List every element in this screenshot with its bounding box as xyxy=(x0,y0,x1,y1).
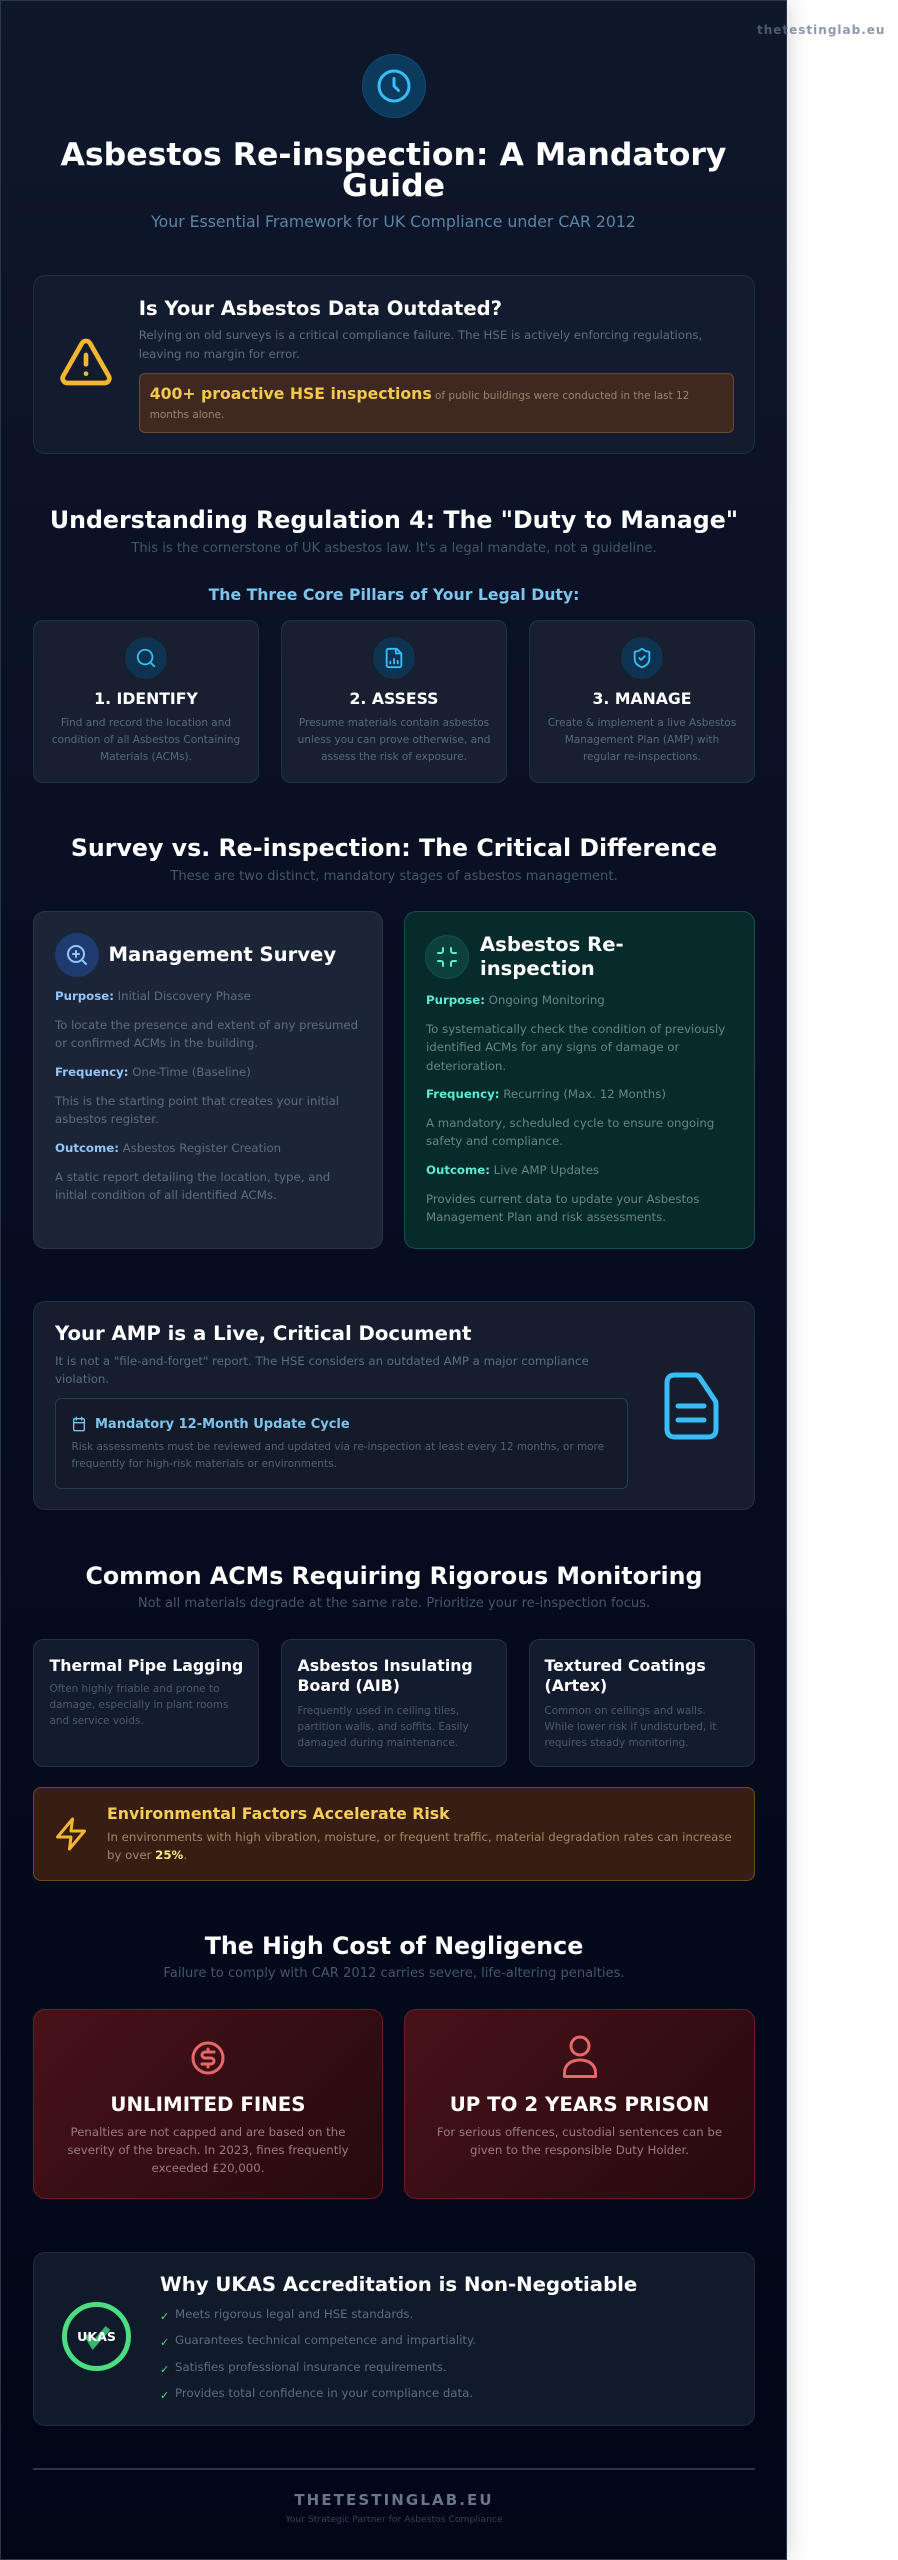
panel body text xyxy=(139,328,702,360)
card details: To locate the presence and extent of any presumed xyxy=(55,1018,358,1032)
card text: damaged during maintenance. xyxy=(298,1736,458,1748)
pillar text: assess the risk of exposure. xyxy=(321,751,467,763)
panel heading: Why UKAS Accreditation is Non-Negotiable xyxy=(160,2272,637,2296)
panel: unlimited fines xyxy=(33,2009,383,2199)
panel heading: Your AMP is a Live, Critical Document xyxy=(55,1322,471,1345)
pillars heading: The Three Core Pillars of Your Legal Duty: xyxy=(209,585,579,604)
section heading: common ACMs: Common ACMs Requiring Rigorous Monitoring xyxy=(86,1562,702,1590)
card text xyxy=(437,2125,722,2157)
pillar text: condition of all Asbestos Containing xyxy=(52,734,240,746)
checklist item: ✓ xyxy=(160,2310,169,2323)
panel body text: leaving no margin for error. xyxy=(139,346,300,360)
card text: Often highly friable and prone to xyxy=(50,1683,219,1695)
card text: While lower risk if undisturbed, it xyxy=(544,1720,716,1732)
panel body text: It is not a "file-and-forget" report. The HSE considers an outdated AMP a major compliance xyxy=(55,1354,589,1368)
panel: management survey xyxy=(33,911,383,1249)
panel body text: violation. xyxy=(55,1372,109,1386)
section heading: duty to manage: Understanding Regulation 4: The "Duty to Manage" xyxy=(50,506,738,534)
panel: outdated data warning xyxy=(33,275,755,454)
icon: UKAS badge: UKAS xyxy=(77,2329,116,2344)
card text: given to the responsible Duty Holder. xyxy=(470,2143,689,2157)
card details: deterioration. xyxy=(426,1058,506,1072)
pillar title: 2. ASSESS xyxy=(350,689,438,708)
subtitle: Your Essential Framework for UK Compliance under CAR 2012 xyxy=(151,212,636,231)
section subheading: This is the cornerstone of UK asbestos law. It's a legal mandate, not a guideline. xyxy=(131,541,657,556)
icon: calendar xyxy=(73,1416,85,1432)
callout text: Risk assessments must be reviewed and updated via re-inspection at least every 12 months, or more xyxy=(72,1440,604,1452)
callout: 12-month update cycle xyxy=(55,1398,628,1489)
card details: Outcome: Asbestos Register Creation xyxy=(55,1141,281,1155)
callout text xyxy=(150,384,689,421)
card text xyxy=(298,1704,469,1748)
pillar text xyxy=(52,716,240,763)
card text: partition walls, and soffits. Easily xyxy=(298,1720,469,1732)
icon: document xyxy=(664,1372,718,1440)
checklist item: Meets rigorous legal and HSE standards. xyxy=(175,2307,413,2321)
icon: search xyxy=(125,637,167,679)
card title: Asbestos Insulating xyxy=(298,1656,473,1675)
card details: Provides current data to update your Asbestos xyxy=(426,1192,699,1206)
pillar text: Management Plan (AMP) with xyxy=(565,734,719,746)
pillar text xyxy=(548,716,736,763)
card heading: Asbestos Re- xyxy=(480,933,624,956)
pillar text: Find and record the location and xyxy=(61,716,231,728)
pillar text: Create & implement a live Asbestos xyxy=(548,716,736,728)
card details: initial condition of all identified ACMs. xyxy=(55,1188,277,1202)
panel: pillar 1 identify xyxy=(33,620,259,783)
card title: UP TO 2 YEARS PRISON xyxy=(450,2093,709,2116)
pillar text: Materials (ACMs). xyxy=(100,751,192,763)
card title: Thermal Pipe Lagging xyxy=(50,1656,243,1675)
checklist item: Satisfies professional insurance requirements. xyxy=(175,2360,447,2374)
callout text: frequently for high-risk materials or environments. xyxy=(72,1458,337,1470)
section subheading: Failure to comply with CAR 2012 carries severe, life-altering penalties. xyxy=(163,1966,625,1981)
icon: lightning bolt xyxy=(56,1818,86,1850)
card text xyxy=(67,2125,349,2175)
panel: prison xyxy=(404,2009,755,2199)
card details: identified ACMs for any signs of damage or xyxy=(426,1040,679,1054)
card details: asbestos register. xyxy=(55,1112,159,1126)
card text xyxy=(544,1704,716,1748)
card details xyxy=(426,993,725,1224)
pillar text: unless you can prove otherwise, and xyxy=(298,734,490,746)
card title: Board (AIB) xyxy=(298,1676,400,1695)
card details: safety and compliance. xyxy=(426,1134,563,1148)
panel body text xyxy=(55,1354,589,1386)
card heading xyxy=(480,933,624,980)
checklist item: ✓ xyxy=(160,2389,169,2402)
icon: money circle xyxy=(192,2042,224,2074)
panel body text: Relying on old surveys is a critical compliance failure. The HSE is actively enforcing regulations, xyxy=(139,328,702,342)
panel: asbestos re-inspection xyxy=(404,911,755,1249)
card text: damage, especially in plant rooms xyxy=(50,1699,228,1711)
card details: or confirmed ACMs in the building. xyxy=(55,1036,258,1050)
header icon: clock xyxy=(362,54,426,118)
panel heading: Is Your Asbestos Data Outdated? xyxy=(139,297,502,320)
icon: magnifier plus xyxy=(54,933,98,977)
icon: scan corners xyxy=(425,935,469,979)
pillar text: regular re-inspections. xyxy=(583,751,701,763)
card details: Purpose: Initial Discovery Phase xyxy=(55,989,251,1003)
section heading: cost of negligence: The High Cost of Negligence xyxy=(205,1932,583,1960)
panel: AMP live document xyxy=(33,1301,755,1510)
card text: Frequently used in ceiling tiles, xyxy=(298,1704,459,1716)
watermark: thetestinglab.eu xyxy=(757,23,885,37)
callout: 400+ inspections xyxy=(139,373,734,433)
card text: For serious offences, custodial sentences can be xyxy=(437,2125,722,2139)
callout text: months alone. xyxy=(150,409,224,421)
card details: Management Plan and risk assessments. xyxy=(426,1210,666,1224)
callout heading: Environmental Factors Accelerate Risk xyxy=(107,1804,450,1823)
card text: Penalties are not capped and are based on the xyxy=(71,2125,345,2139)
icon: warning triangle xyxy=(60,338,112,386)
card title: Textured Coatings xyxy=(544,1656,706,1675)
panel: UKAS accreditation xyxy=(33,2252,755,2426)
panel: pillar 3 manage xyxy=(529,620,755,783)
card heading: inspection xyxy=(480,957,595,980)
panel: textured coatings xyxy=(529,1639,755,1767)
callout text: by over 25%. xyxy=(107,1848,187,1862)
panel: pillar 2 assess xyxy=(281,620,507,783)
card title: (Artex) xyxy=(544,1676,607,1695)
title: Guide xyxy=(342,168,445,204)
title xyxy=(60,137,726,204)
checklist item: Provides total confidence in your compliance data. xyxy=(175,2386,473,2400)
pillar title: 1. IDENTIFY xyxy=(94,689,198,708)
card heading: Management Survey xyxy=(108,943,336,966)
card details: Frequency: One-Time (Baseline) xyxy=(55,1065,251,1079)
icon: file chart xyxy=(373,637,415,679)
pillar title: 3. MANAGE xyxy=(593,689,691,708)
callout heading: Mandatory 12-Month Update Cycle xyxy=(95,1417,350,1432)
card details: Purpose: Ongoing Monitoring xyxy=(426,993,605,1007)
card details: This is the starting point that creates your initial xyxy=(55,1094,339,1108)
card details: A mandatory, scheduled cycle to ensure ongoing xyxy=(426,1116,714,1130)
card text: severity of the breach. In 2023, fines frequently xyxy=(67,2143,349,2157)
panel: environmental factors xyxy=(33,1787,755,1881)
icon: person xyxy=(563,2036,597,2078)
callout text: In environments with high vibration, moisture, or frequent traffic, material degradation rates can increase xyxy=(107,1830,732,1844)
section subheading: Not all materials degrade at the same rate. Prioritize your re-inspection focus. xyxy=(138,1596,650,1611)
panel: asbestos insulating board xyxy=(281,1639,507,1767)
card text: and service voids. xyxy=(50,1715,144,1727)
card title: UNLIMITED FINES xyxy=(110,2093,306,2116)
pillar text: Presume materials contain asbestos xyxy=(299,716,489,728)
card text: requires steady monitoring. xyxy=(544,1736,688,1748)
callout text xyxy=(72,1440,604,1470)
section subheading: These are two distinct, mandatory stages of asbestos management. xyxy=(170,869,618,884)
checklist item: Guarantees technical competence and impartiality. xyxy=(175,2333,476,2347)
icon: UKAS badge xyxy=(62,2302,131,2371)
card details: Outcome: Live AMP Updates xyxy=(426,1163,599,1177)
callout text xyxy=(107,1830,732,1862)
card details: A static report detailing the location, type, and xyxy=(55,1170,330,1184)
card text: Common on ceilings and walls. xyxy=(544,1704,706,1716)
card title xyxy=(544,1656,706,1695)
card details: Frequency: Recurring (Max. 12 Months) xyxy=(426,1087,666,1101)
card text xyxy=(50,1683,228,1727)
card text: exceeded £20,000. xyxy=(152,2161,264,2175)
footer tagline: Your Strategic Partner for Asbestos Compliance xyxy=(285,2514,503,2525)
section heading: survey vs re-inspection: Survey vs. Re-inspection: The Critical Difference xyxy=(71,834,717,862)
title: Asbestos Re-inspection: A Mandatory xyxy=(61,137,726,173)
card title xyxy=(298,1656,473,1695)
card details: To systematically check the condition of previously xyxy=(426,1022,725,1036)
pillar text xyxy=(298,716,490,763)
callout text: 400+ proactive HSE inspections of public buildings were conducted in the last 12 xyxy=(150,384,689,403)
panel: thermal pipe lagging xyxy=(33,1639,259,1767)
footer brand: THETESTINGLAB.EU xyxy=(294,2491,494,2509)
card details xyxy=(55,989,358,1202)
icon: shield check xyxy=(621,637,663,679)
checklist item: ✓ xyxy=(160,2363,169,2376)
checklist item: ✓ xyxy=(160,2336,169,2349)
